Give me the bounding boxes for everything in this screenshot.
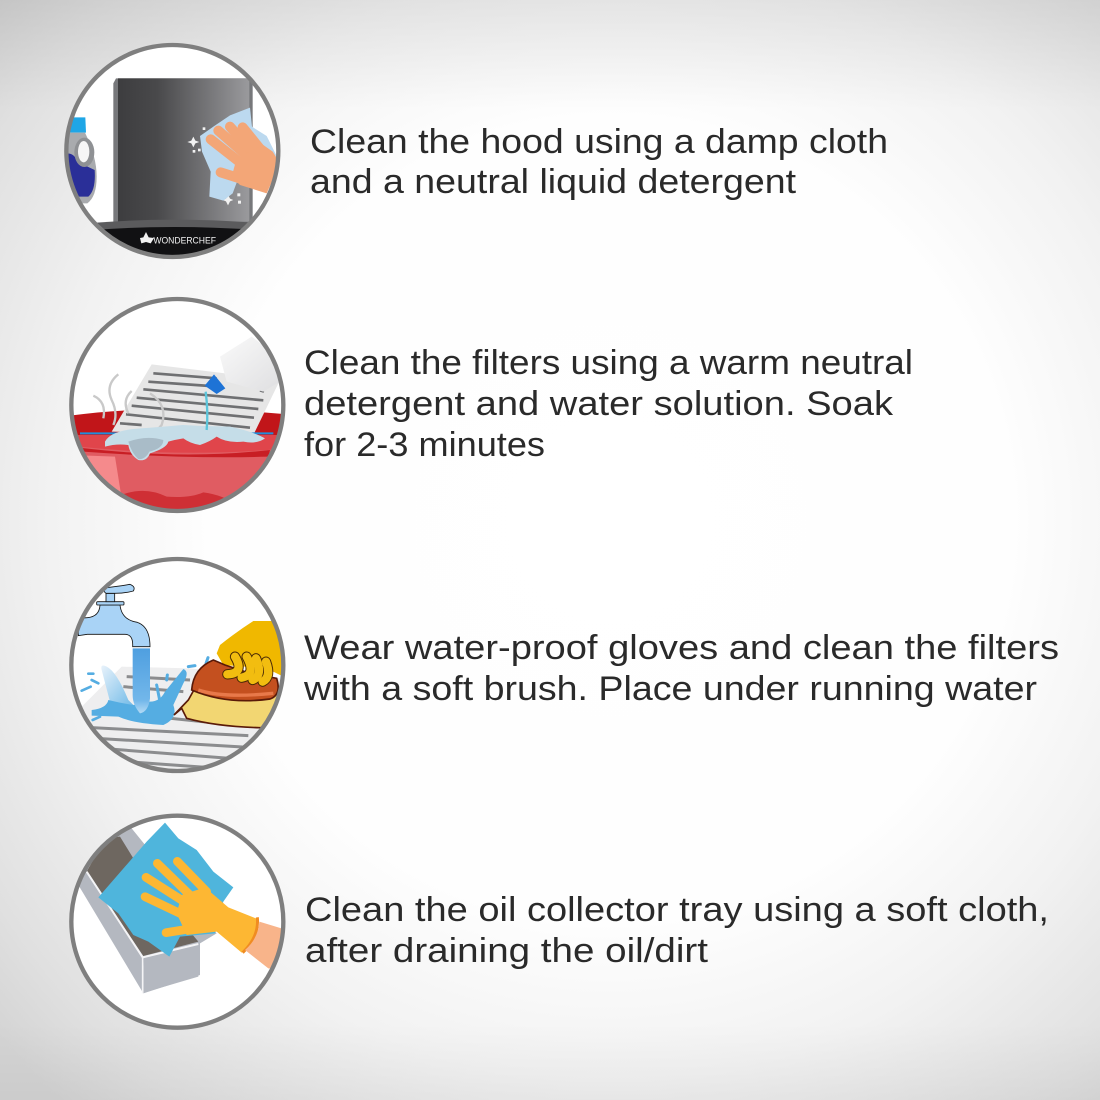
icon: oil collector tray: [78, 828, 217, 993]
text block: step 2: for 2-3 minutes: [304, 426, 545, 464]
panel: step 1 hood cleaning icon: [63, 45, 280, 263]
text block: step 1: and a neutral liquid detergent: [310, 163, 796, 201]
icon: sparkles: [187, 127, 241, 205]
panel: step 4 oil tray cleaning icon: [71, 816, 287, 1028]
text block: step 2: Clean the filters using a warm neutral: [304, 344, 913, 382]
icon: hood base with logo: WONDERCHEF: [153, 235, 216, 245]
icon: hand: [211, 127, 280, 193]
icon: filter grate: [82, 666, 280, 769]
icon: cloth: [200, 108, 277, 201]
icon: water splash: [82, 658, 208, 725]
icon: steam: [93, 374, 164, 427]
icon: tub body: [78, 435, 277, 509]
panel: step 2 filter soaking icon: [70, 299, 287, 518]
icon: detergent bottle: [68, 117, 97, 204]
text block: step 4: [305, 891, 1049, 970]
icon: blue cloth: [98, 823, 233, 957]
icon: arm: [245, 922, 281, 968]
icon: water tap: [78, 584, 150, 647]
text block: step 2: [304, 344, 913, 464]
panel: step 3 brushing under water icon: [70, 559, 283, 778]
text block: step 1: [310, 123, 888, 201]
icon: detergent stream: [206, 392, 207, 430]
text block: step 4: after draining the oil/dirt: [305, 932, 708, 970]
icon: water and foam: [80, 425, 273, 460]
icon: brush with gloved hand: [174, 621, 283, 728]
text block: step 3: with a soft brush. Place under running water: [303, 670, 1037, 708]
icon: red tub back: [74, 410, 281, 435]
icon: water stream: [133, 648, 150, 713]
text block: step 4: Clean the oil collector tray using a soft cloth,: [305, 891, 1049, 929]
icon: hood base with logo: [97, 220, 248, 255]
text block: step 1: Clean the hood using a damp cloth: [310, 123, 888, 161]
text block: step 2: detergent and water solution. Soak: [304, 385, 894, 423]
icon: filter grate: [112, 364, 280, 435]
text block: step 3: [303, 629, 1059, 708]
icon: detergent bottle: [205, 337, 285, 394]
text block: step 3: Wear water-proof gloves and clean the filters: [304, 629, 1059, 667]
icon: yellow glove: [145, 861, 258, 953]
icon: hood panel: [113, 78, 253, 223]
